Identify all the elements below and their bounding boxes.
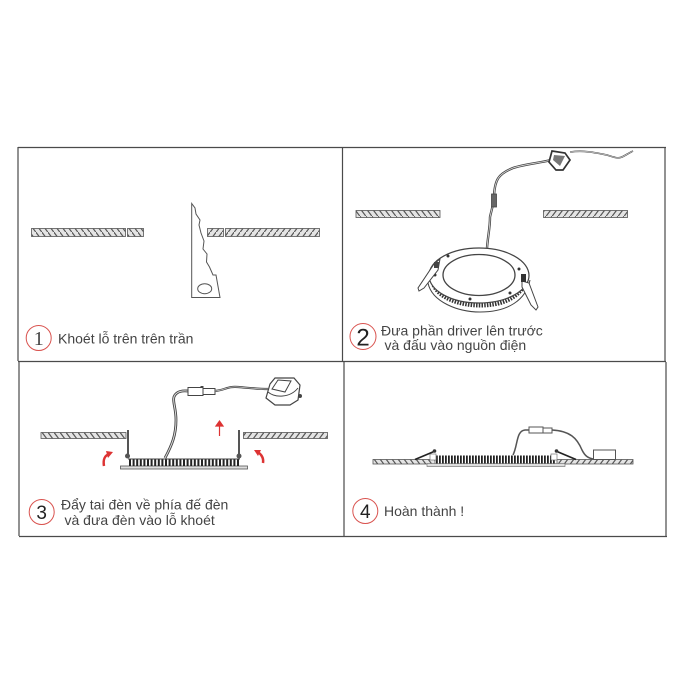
- step number 4: [353, 498, 378, 524]
- step number 1: [26, 326, 51, 350]
- step 3 text: Đẩy tai đèn về phía đế đèn: [61, 496, 228, 512]
- panel 1: cut hole: [26, 204, 319, 350]
- step 3 text: [61, 496, 228, 528]
- icon: driver and cable: [487, 151, 633, 248]
- arrow: left curved head: [106, 451, 113, 458]
- step 3 text: và đưa đèn vào lỗ khoét: [64, 512, 215, 528]
- icon: round LED panel: [418, 248, 538, 312]
- step 2 text: Đưa phần driver lên trước: [381, 322, 543, 338]
- panel grid frame: [18, 147, 667, 536]
- panel 3: push into hole: [29, 378, 327, 528]
- step number 4: 4: [360, 502, 371, 523]
- arrow: left curved: [104, 454, 109, 466]
- icon: cable and driver: [513, 427, 616, 460]
- icon: flat LED panel side view: [120, 430, 248, 469]
- arrow: up: [216, 421, 223, 436]
- step number 3: [29, 500, 54, 524]
- ceiling pieces: [356, 210, 628, 218]
- icon: installed panel: [415, 449, 576, 466]
- ceiling right piece: [208, 228, 320, 236]
- arrow: right curved head: [254, 450, 261, 456]
- ceiling left piece: [32, 228, 144, 236]
- panel 4: finished: [353, 427, 633, 524]
- step number 2: 2: [356, 324, 370, 352]
- step 1 text: Khoét lỗ trên trên trần: [58, 330, 193, 346]
- panel 2: driver first: [350, 151, 633, 353]
- step 2 text: và đấu vào nguồn điện: [384, 337, 526, 353]
- step 4 text: Hoàn thành !: [384, 503, 464, 519]
- step 2 text: [381, 322, 543, 353]
- step number 3: 3: [36, 503, 47, 524]
- icon: cut-out template: [192, 204, 220, 298]
- ceiling: [373, 460, 633, 464]
- icon: driver and cable: [165, 378, 302, 458]
- step number 1: 1: [34, 328, 44, 350]
- ceiling pieces: [41, 432, 328, 438]
- step number 2: [350, 324, 376, 352]
- arrow: right curved: [257, 452, 263, 463]
